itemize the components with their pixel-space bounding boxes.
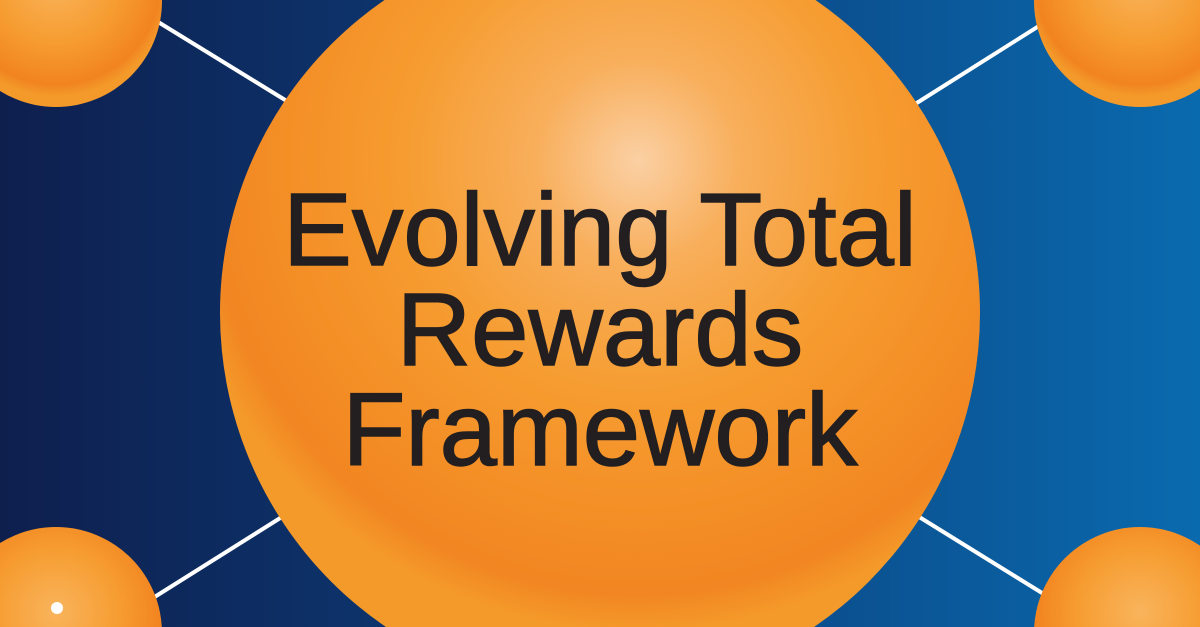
central sphere bbox=[220, 0, 980, 627]
corner sphere: bottom-right bbox=[1034, 527, 1200, 627]
icon: white dot bbox=[51, 602, 63, 614]
corner sphere: top-right bbox=[1034, 0, 1200, 107]
title: Evolving Total bbox=[283, 172, 917, 287]
title: Framework bbox=[342, 372, 858, 487]
title bbox=[283, 172, 917, 487]
title: Rewards bbox=[397, 272, 803, 387]
corner sphere: bottom-left bbox=[0, 527, 162, 627]
connector lines bbox=[145, 17, 1055, 603]
corner sphere: top-left bbox=[0, 0, 162, 107]
